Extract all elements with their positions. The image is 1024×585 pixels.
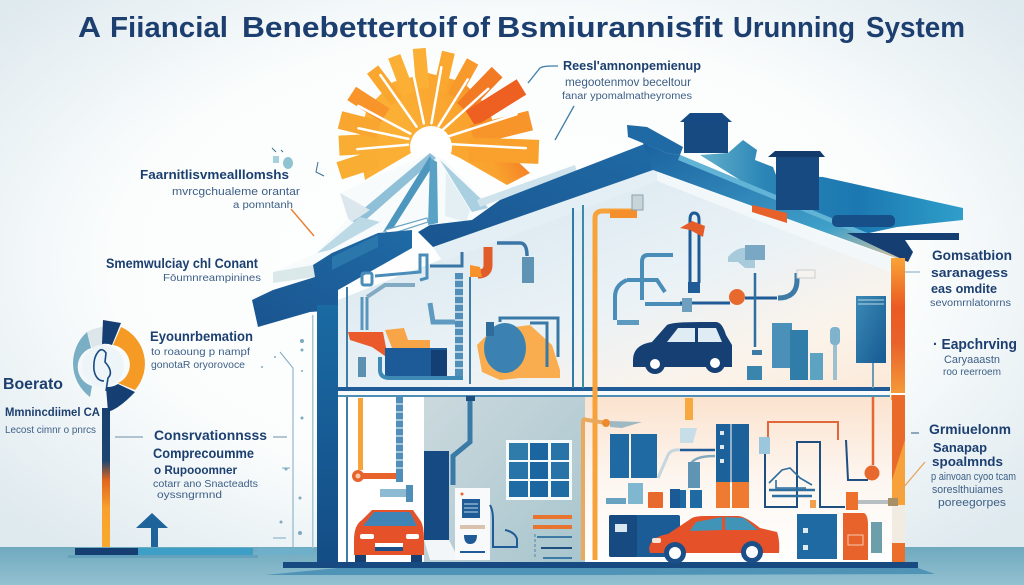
- callout: right middle: · Eapchrving: [933, 336, 1017, 353]
- callout: left lower: [115, 427, 287, 501]
- roof: right upper section: [700, 140, 963, 235]
- callout: donut label: [3, 376, 100, 436]
- roof: underside white strip left: [433, 170, 680, 262]
- ship sketch: [769, 468, 815, 496]
- callout: top right: [528, 58, 701, 140]
- roof: light stripe: [678, 155, 913, 253]
- callout: top right: fanar ypomalmatheyromes: [562, 91, 692, 102]
- callout: right upper: [905, 247, 1012, 309]
- house interior: lower floor grey room: [424, 397, 585, 562]
- callout: left upper: a pomntanh: [233, 200, 293, 211]
- callout: right lower: poreegorpes: [938, 497, 1007, 509]
- callout: left center: gonotaR oryorovoce: [151, 360, 245, 371]
- wall: right column: [891, 258, 905, 562]
- roof: navy eave: [847, 233, 959, 262]
- title: Benebettertoif: [242, 12, 457, 44]
- orange elbow with blue pipe and cup: [470, 243, 534, 283]
- callout: right upper: saranagess: [931, 265, 1008, 280]
- callout: right lower: [897, 421, 1016, 509]
- up arrow: [136, 513, 168, 547]
- callout: left lower: Consrvationnsss: [154, 427, 267, 443]
- chimney: left: [680, 113, 732, 153]
- base bars: [68, 548, 313, 558]
- callout: left middle: [106, 255, 261, 284]
- list bars: [533, 515, 572, 559]
- callout: right lower: Grmiuelonm: [929, 421, 1011, 437]
- tall cabinet blue and orange: [716, 424, 749, 508]
- upper right pipework: [680, 245, 815, 347]
- red car ground floor left: [354, 510, 424, 562]
- solar fan on roof: [273, 153, 577, 283]
- callout: right lower: soreslthuiames: [932, 484, 1003, 496]
- wall: left column: [317, 305, 338, 563]
- lower right cabinets: [797, 492, 898, 560]
- callout: left center: Eyounrbemation: [150, 329, 253, 344]
- blue storage blocks upper floor: [747, 323, 840, 380]
- callout: right upper: Gomsatbion: [932, 247, 1012, 263]
- title: System: [866, 12, 965, 44]
- thin leader and dots beside wall: [261, 315, 314, 560]
- callout: right lower: spoalmnds: [932, 454, 1003, 469]
- upper middle pipework: [615, 255, 690, 325]
- callout: right middle: [933, 336, 1017, 378]
- upper left pipework: [362, 252, 470, 384]
- ground floor right cabinets: [606, 434, 680, 557]
- callout: left lower: cotarr ano Snacteadts: [153, 478, 258, 490]
- lower right pipe network: [759, 397, 880, 507]
- title: of: [462, 12, 490, 44]
- white machine: [424, 488, 517, 560]
- callout: left middle: Fōumnreampinines: [163, 272, 261, 284]
- blue tank with orange surround: [477, 318, 560, 380]
- title: [78, 12, 965, 44]
- roof: left eave section: [252, 230, 412, 327]
- vertical partition lines: [346, 205, 584, 562]
- callout: left center: [150, 329, 253, 371]
- downpipe from ceiling: [453, 396, 475, 485]
- orange pipe with knob: [583, 419, 642, 560]
- callout: left lower: Comprecoumme: [153, 445, 254, 461]
- fixture stack: [680, 398, 715, 508]
- callout: left upper: Faarnitlisvmealllomshs: [140, 167, 289, 182]
- house interior: lower floor right room: [585, 397, 892, 563]
- floor beam between storeys: [338, 387, 890, 397]
- callout: left lower: o Rupooomner: [154, 463, 237, 477]
- donut chart with post: [73, 320, 145, 547]
- roof: orange vent: [752, 205, 787, 223]
- wall panel with stand: [856, 296, 886, 388]
- callout: left center: to roaoung p nampf: [151, 346, 250, 358]
- roof: dark pill vent: [832, 215, 895, 227]
- orange vertical riser pipe: [595, 195, 643, 560]
- furnace with orange hood: [348, 328, 463, 378]
- callout: donut label: Lecost cimnr o pnrcs: [5, 425, 96, 436]
- callout: top right: Reesl'amnonpemienup: [563, 58, 701, 73]
- ladder pipe: [455, 273, 463, 380]
- callout: right upper: eas omdite: [931, 281, 997, 296]
- roof: underside white strip right: [657, 172, 893, 272]
- roof: left slope section: [418, 143, 653, 247]
- callout: left lower: oyssngrmnd: [157, 489, 222, 501]
- roof: ridge cap: [627, 125, 683, 155]
- roof: right slope: [643, 143, 913, 262]
- title: Fiiancial: [110, 12, 228, 44]
- sun: [336, 48, 539, 185]
- callout: left upper: [140, 167, 314, 236]
- window: [506, 440, 572, 500]
- title: Bsmiurannisfit: [497, 12, 723, 44]
- red car ground floor right: [649, 516, 779, 564]
- callout: right lower: Sanapap: [933, 440, 987, 455]
- decorative icon cluster near sun: [272, 148, 324, 176]
- inverted U pipe with red valve: [680, 213, 705, 293]
- navy door: [424, 451, 449, 540]
- callout: right middle: roo reerroem: [943, 367, 1001, 378]
- ground floor left pipes: [352, 396, 413, 502]
- callout: right upper: sevomrnlatonrns: [930, 298, 1011, 309]
- callout: top right: megootenmov beceltour: [565, 75, 691, 89]
- callout: donut label: Mmnincdiimel CA: [5, 405, 100, 419]
- callout: left upper: mvrcgchualeme orantar: [172, 186, 300, 198]
- house interior: lower floor left room: [338, 395, 428, 563]
- title: A: [78, 12, 101, 44]
- house interior: upper floor: [338, 176, 890, 392]
- callout: left middle: Smemwulciay chl Conant: [106, 255, 258, 271]
- navy car upper floor: [633, 322, 732, 374]
- callout: right middle: Caryaaastn: [944, 354, 1000, 366]
- title: Urunning: [733, 12, 855, 44]
- ground floor slab: [265, 562, 935, 575]
- callout: donut label: Boerato: [3, 376, 63, 393]
- chimney: right: [768, 151, 825, 210]
- ground band: [0, 547, 1024, 585]
